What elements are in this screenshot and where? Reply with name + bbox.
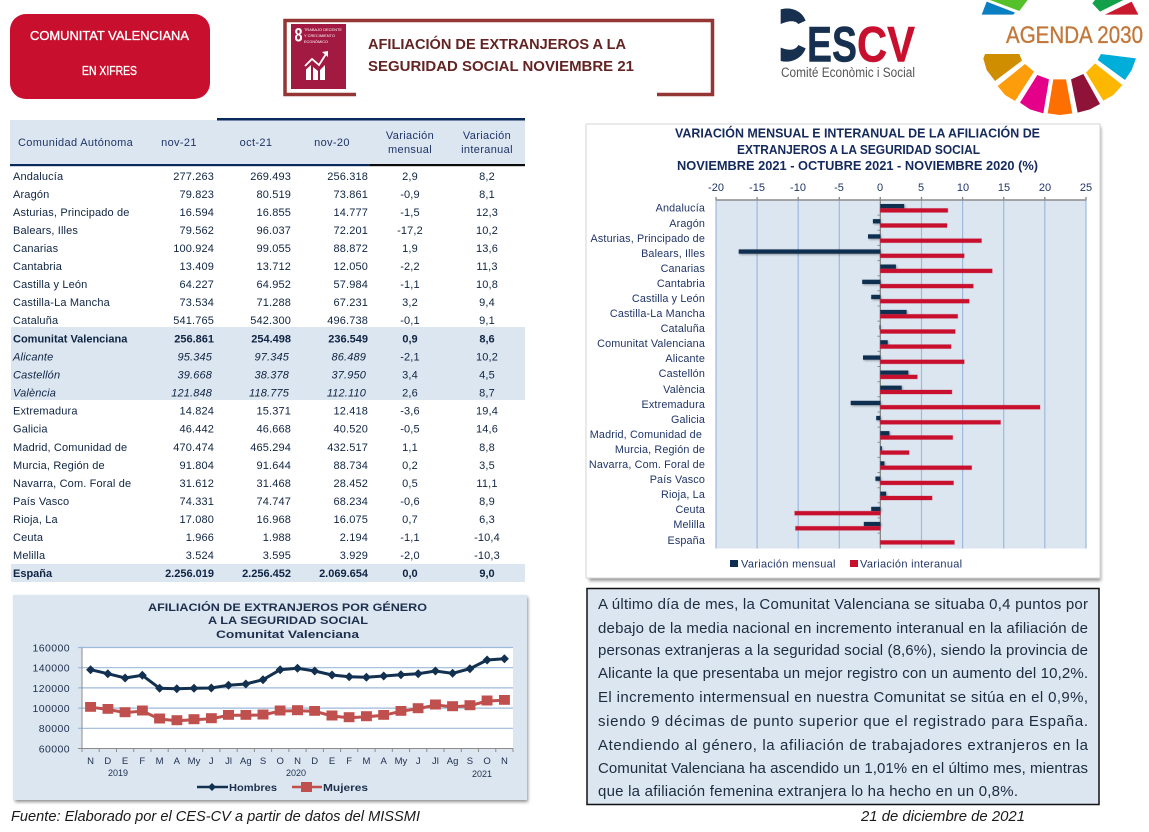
panel: title frame xyxy=(285,20,712,94)
text block: commentary xyxy=(587,588,1099,804)
table row: Balears xyxy=(13,225,498,237)
bar chart top axis: 20 xyxy=(1039,182,1051,194)
table row: Navarra: Navarra, Com. Foral de xyxy=(13,478,131,490)
table row: Galicia: 46.442 xyxy=(179,424,214,436)
table row: Castilla y León xyxy=(13,279,498,291)
line chart legend: Mujeres xyxy=(323,782,368,794)
x axis labels: My xyxy=(395,756,407,767)
table row: País Vasco: 68.234 xyxy=(333,496,368,508)
table row: Cantabria: 11,3 xyxy=(476,261,498,273)
table row: Aragón: -0,9 xyxy=(400,189,420,201)
table row: País Vasco: -0,6 xyxy=(400,496,420,508)
line chart title: A LA SEGURIDAD SOCIAL xyxy=(208,615,368,627)
table row: Balears: 79.562 xyxy=(179,225,214,237)
table row: Galicia: Galicia xyxy=(13,424,48,436)
table row: Madrid: 465.294 xyxy=(250,442,291,454)
bar chart title xyxy=(675,126,1040,173)
table row: Castellón: Castellón xyxy=(13,370,60,382)
category labels: País Vasco xyxy=(650,474,705,486)
icon: SDG 8: ECONÓMICO xyxy=(304,39,328,44)
category labels xyxy=(589,202,705,547)
table row: Rioja: 16.075 xyxy=(333,514,368,526)
table row: Cantabria xyxy=(13,261,498,273)
table row: España: 9,0 xyxy=(479,568,495,580)
bars: variación mensual xyxy=(739,204,908,526)
table row: Cataluña: 9,1 xyxy=(479,315,495,327)
line chart title xyxy=(148,601,427,641)
table row: Castilla y León: 10,8 xyxy=(476,279,498,291)
y axis labels: 120000 xyxy=(33,683,70,695)
table row: Navarra: 31.468 xyxy=(256,478,291,490)
bar chart title: EXTRANJEROS A LA SEGURIDAD SOCIAL xyxy=(737,143,980,157)
table row: València: 118.775 xyxy=(249,388,290,400)
heading: en xifres: EN XIFRES xyxy=(82,63,137,78)
text block: commentary: debajo de la media nacional en incremento interanual en la afiliación de xyxy=(598,620,1088,637)
table row: País Vasco: 8,9 xyxy=(479,496,495,508)
table row: Balears: Balears, Illes xyxy=(13,225,78,237)
y axis labels: 140000 xyxy=(33,662,70,674)
category labels: España xyxy=(667,535,705,547)
table row: València: València xyxy=(13,388,56,400)
table row: Navarra: 11,1 xyxy=(476,478,498,490)
table row: Andalucía: Andalucía xyxy=(13,171,64,183)
x axis labels: N xyxy=(87,756,94,767)
icon: SDG 8: TRABAJO DECENTE xyxy=(304,27,342,32)
table row: Cataluña: 542.300 xyxy=(250,315,291,327)
x axis labels: N xyxy=(294,756,301,767)
table row: Andalucía: 8,2 xyxy=(479,171,495,183)
table row: Galicia xyxy=(13,424,498,436)
table row: Extremadura: Extremadura xyxy=(13,406,78,418)
table row: Cantabria: 12.050 xyxy=(333,261,368,273)
table row: Castilla y León: 64.952 xyxy=(256,279,291,291)
table row: Asturias: -1,5 xyxy=(400,207,420,219)
bar chart top axis: 10 xyxy=(957,182,969,194)
line chart legend xyxy=(197,782,368,794)
title: SEGURIDAD SOCIAL NOVIEMBRE 21 xyxy=(368,59,634,75)
table row: Comunitat Valenciana: 256.861 xyxy=(174,334,214,346)
category labels: Cataluña xyxy=(661,323,705,335)
bar chart top axis: 0 xyxy=(877,182,883,194)
table row: Balears: 96.037 xyxy=(256,225,291,237)
icon: SDG 8 xyxy=(291,24,346,89)
logo: CES CV: ES xyxy=(807,16,857,72)
table row: Cataluña: 496.738 xyxy=(327,315,368,327)
table row: Madrid: 1,1 xyxy=(402,442,418,454)
table row: Rioja: 16.968 xyxy=(256,514,291,526)
bar chart top axis: 15 xyxy=(998,182,1010,194)
text block: commentary: Atendiendo al género, la afiliación de trabajadores extranjeros en la xyxy=(598,737,1089,754)
category labels: Extremadura xyxy=(642,399,705,411)
logo: CES CV: Comité Econòmic i Social xyxy=(781,65,915,80)
category labels: València xyxy=(663,384,705,396)
table header: Variación xyxy=(386,130,434,142)
table row: Madrid xyxy=(13,442,495,454)
x axis labels: Ag xyxy=(240,756,252,767)
heading: Comunitat Valenciana: COMUNITAT VALENCIANA xyxy=(30,28,189,43)
table row: Asturias: 16.855 xyxy=(256,207,291,219)
category labels: Rioja, La xyxy=(661,489,705,501)
table row: Comunitat Valenciana: Comunitat Valenciana xyxy=(13,334,128,346)
text block: commentary: que la afiliación femenina extranjera lo ha hecho en un 0,8%. xyxy=(598,783,1018,800)
table row: Cantabria: 13.712 xyxy=(256,261,291,273)
table row: Melilla: 3.524 xyxy=(186,550,214,562)
table row: Melilla: -2,0 xyxy=(400,550,420,562)
title xyxy=(368,35,634,75)
table row: Comunitat Valenciana xyxy=(13,334,495,346)
table row: Madrid: 432.517 xyxy=(327,442,368,454)
panel: line chart afiliación por género xyxy=(13,595,528,802)
table row: Castilla-La Mancha: 73.534 xyxy=(179,297,214,309)
table row: Alicante xyxy=(12,352,498,364)
bar chart top axis: -10 xyxy=(790,182,806,194)
table row: Asturias: Asturias, Principado de xyxy=(13,207,130,219)
bar chart top axis: -5 xyxy=(834,182,844,194)
table: afiliación por comunidad autónoma xyxy=(10,118,525,582)
table row: Castilla y León: 64.227 xyxy=(179,279,214,291)
category labels: Alicante xyxy=(665,353,705,365)
table row: Navarra: 28.452 xyxy=(333,478,368,490)
table row: Comunitat Valenciana: 8,6 xyxy=(479,334,495,346)
table row: Ceuta: 2.194 xyxy=(340,532,368,544)
table row: València: 2,6 xyxy=(402,388,418,400)
bar chart top axis xyxy=(708,182,1092,194)
table row: Canarias: 100.924 xyxy=(173,243,214,255)
x axis labels: J xyxy=(416,756,421,767)
table row: Melilla: -10,3 xyxy=(474,550,500,562)
table row: España: 2.069.654 xyxy=(319,568,369,580)
table row: València: 8,7 xyxy=(479,388,495,400)
bar chart top axis: 5 xyxy=(918,182,924,194)
line: Mujeres xyxy=(91,700,504,721)
text block: commentary: personas extranjeras a la seguridad social (8,6%), siendo la provincia de xyxy=(598,642,1088,659)
table row: Asturias: 14.777 xyxy=(333,207,368,219)
table row: País Vasco xyxy=(13,496,495,508)
x axis labels: M xyxy=(156,756,164,767)
table row: País Vasco: 74.331 xyxy=(179,496,214,508)
table row: Comunitat Valenciana: 254.498 xyxy=(251,334,291,346)
table header: oct-21 xyxy=(240,137,272,149)
category labels: Comunitat Valenciana xyxy=(597,338,705,350)
table row: Rioja: 0,7 xyxy=(402,514,418,526)
panel: Comunitat Valenciana en xifres xyxy=(10,14,210,99)
y axis labels: 100000 xyxy=(33,703,70,715)
table row: Aragón: 79.823 xyxy=(179,189,214,201)
table row: Canarias: 1,9 xyxy=(402,243,418,255)
line chart legend: Hombres xyxy=(229,782,277,794)
logo: CES CV: CV xyxy=(857,16,916,72)
line: Hombres xyxy=(91,659,504,689)
x axis labels: O xyxy=(483,756,491,767)
bar chart top axis: -20 xyxy=(708,182,724,194)
table row: Rioja: 6,3 xyxy=(479,514,495,526)
x axis labels: O xyxy=(277,756,284,767)
table header: nov-21 xyxy=(161,137,197,149)
x axis labels: Ag xyxy=(447,756,458,767)
category labels: Navarra, Com. Foral de xyxy=(589,459,705,471)
logo: CES CV xyxy=(781,8,916,80)
table row: Cataluña: -0,1 xyxy=(400,315,420,327)
icon: SDG 8: Y CRECIMIENTO xyxy=(304,33,335,38)
table row: Galicia: 40.520 xyxy=(333,424,368,436)
y axis labels: 160000 xyxy=(33,642,70,654)
table row: Rioja: Rioja, La xyxy=(13,514,58,526)
table row: Castellón: 4,5 xyxy=(479,370,495,382)
line chart title: AFILIACIÓN DE EXTRANJEROS POR GÉNERO xyxy=(148,601,427,614)
table row: Balears: -17,2 xyxy=(397,225,423,237)
table row: Comunitat Valenciana: 0,9 xyxy=(402,334,418,346)
x axis labels: D xyxy=(104,756,111,767)
table row: Murcia: 91.804 xyxy=(179,460,214,472)
category labels: Cantabria xyxy=(657,278,705,290)
table row: Castilla-La Mancha: 9,4 xyxy=(479,297,495,309)
table row: Alicante: 86.489 xyxy=(331,352,366,364)
text block: commentary: El incremento intermensual en nuestra Comunitat se sitúa en el 0,9%, xyxy=(598,689,1088,706)
table row: Asturias: 12,3 xyxy=(476,207,498,219)
text block: commentary: Comunitat Valenciana ha ascendido un 1,01% en el último mes, mientras xyxy=(598,760,1088,777)
table row: Castilla-La Mancha xyxy=(13,297,495,309)
x axis labels: 2019 xyxy=(108,768,128,778)
table header xyxy=(18,130,513,156)
line chart title: Comunitat Valenciana xyxy=(216,629,360,641)
x axis labels: 2021 xyxy=(472,769,492,779)
bars: variación interanual xyxy=(795,208,1040,544)
table row: Alicante: -2,1 xyxy=(400,352,420,364)
date: 21 de diciembre de 2021 xyxy=(860,809,1025,825)
table row: Extremadura: 19,4 xyxy=(476,406,498,418)
category labels: Castilla y León xyxy=(632,293,705,305)
category labels: Balears, Illes xyxy=(641,248,705,260)
bar chart title: NOVIEMBRE 2021 - OCTUBRE 2021 - NOVIEMBRE 2020 (%) xyxy=(677,159,1038,173)
table header: interanual xyxy=(461,144,513,156)
table row: Navarra: 31.612 xyxy=(179,478,214,490)
table row: Ceuta: 1.988 xyxy=(263,532,291,544)
text block: commentary: Alicante la que presentaba un mejor registro con un aumento del 10,2%. xyxy=(598,665,1088,682)
table row: Andalucía: 269.493 xyxy=(250,171,291,183)
table row: Cataluña xyxy=(13,315,495,327)
x axis labels: A xyxy=(381,756,388,767)
table row: Castellón: 37.950 xyxy=(331,370,367,382)
table row: España: 2.256.452 xyxy=(242,568,291,580)
table row: Extremadura: -3,6 xyxy=(400,406,420,418)
table row: Andalucía: 2,9 xyxy=(402,171,418,183)
table row: Murcia xyxy=(13,460,495,472)
text block: commentary: siendo 9 décimas de punto superior que el registrado para España. xyxy=(598,713,1088,730)
table row: Murcia: 3,5 xyxy=(479,460,495,472)
table row: Melilla: 3.929 xyxy=(340,550,368,562)
table row: Andalucía: 256.318 xyxy=(327,171,368,183)
table row: Castellón: 38.378 xyxy=(254,370,290,382)
table row: Castilla-La Mancha: 71.288 xyxy=(256,297,291,309)
table row: España: 2.256.019 xyxy=(165,568,214,580)
table row: Cantabria: -2,2 xyxy=(400,261,420,273)
table row: Melilla: 3.595 xyxy=(263,550,291,562)
table row: Aragón: 73.861 xyxy=(333,189,368,201)
y axis labels: 60000 xyxy=(39,744,70,756)
x axis labels: Jl xyxy=(225,756,232,767)
table row: Cataluña: 541.765 xyxy=(173,315,214,327)
table header: Comunidad Autónoma xyxy=(18,137,134,149)
category labels: Castilla-La Mancha xyxy=(610,308,705,320)
table row: Ceuta: -1,1 xyxy=(400,532,420,544)
table row: Madrid: 470.474 xyxy=(173,442,214,454)
table row: València: 121.848 xyxy=(171,388,213,400)
table row: Castilla-La Mancha: Castilla-La Mancha xyxy=(13,297,111,309)
x axis labels: A xyxy=(174,756,181,767)
table row: Comunitat Valenciana: 236.549 xyxy=(328,334,368,346)
table row: Navarra: 0,5 xyxy=(402,478,418,490)
table header: mensual xyxy=(388,144,432,156)
category labels: Ceuta xyxy=(675,504,705,516)
table row: Andalucía: 277.263 xyxy=(173,171,214,183)
logo: Agenda 2030 xyxy=(982,0,1143,115)
table row: Ceuta: 1.966 xyxy=(186,532,214,544)
table row: Alicante: 10,2 xyxy=(476,352,498,364)
table row: Extremadura: 14.824 xyxy=(179,406,214,418)
table row: Andalucía xyxy=(13,171,495,183)
table row: Castilla y León: -1,1 xyxy=(400,279,420,291)
table row: Melilla xyxy=(13,550,500,562)
table row: Rioja: 17.080 xyxy=(179,514,214,526)
source note: Fuente: Elaborado por el CES-CV a partir de datos del MISSMI xyxy=(11,809,420,825)
table row: Cataluña: Cataluña xyxy=(13,315,59,327)
table row: España: España xyxy=(13,568,53,580)
x axis labels: F xyxy=(346,756,352,767)
category labels: Murcia, Región de xyxy=(615,444,705,456)
table row: Extremadura: 15.371 xyxy=(256,406,291,418)
table row: Castellón: 3,4 xyxy=(402,370,418,382)
x axis labels: D xyxy=(311,756,318,767)
table row: Balears: 10,2 xyxy=(476,225,498,237)
bar chart top axis: 25 xyxy=(1080,182,1092,194)
category labels: Galicia xyxy=(671,414,705,426)
x axis labels: M xyxy=(362,756,370,767)
table row: Cantabria: 13.409 xyxy=(179,261,214,273)
title: AFILIACIÓN DE EXTRANJEROS A LA xyxy=(368,35,627,53)
x axis labels: 2020 xyxy=(286,768,306,778)
category labels: Asturias, Principado de xyxy=(591,233,705,245)
table row: Canarias: Canarias xyxy=(13,243,59,255)
table row: Alicante: Alicante xyxy=(12,352,53,364)
table row: Aragón xyxy=(13,189,495,201)
table row: Murcia: 88.734 xyxy=(333,460,368,472)
table row: Extremadura xyxy=(13,406,498,418)
table row: Castellón xyxy=(13,370,495,382)
y axis labels xyxy=(33,642,70,756)
table row: Asturias: 16.594 xyxy=(179,207,214,219)
x axis labels: S xyxy=(260,756,266,767)
table row: València: 112.110 xyxy=(327,388,367,400)
table row: Aragón: Aragón xyxy=(13,189,49,201)
bar chart legend: Variación mensual xyxy=(741,558,836,570)
category labels: Canarias xyxy=(661,263,705,275)
table row: Canarias: 88.872 xyxy=(333,243,368,255)
table row: Cantabria: Cantabria xyxy=(13,261,63,273)
category labels: Melilla xyxy=(673,519,705,531)
x axis labels: My xyxy=(188,756,201,767)
table row: Melilla: Melilla xyxy=(13,550,46,562)
table row: Alicante: 95.345 xyxy=(177,352,213,364)
table row: Galicia: -0,5 xyxy=(400,424,420,436)
category labels: Aragón xyxy=(669,218,705,230)
table row: País Vasco: 74.747 xyxy=(256,496,291,508)
x axis labels: Jl xyxy=(432,756,439,767)
table row: Murcia: 91.644 xyxy=(256,460,291,472)
table row: España: 0,0 xyxy=(402,568,418,580)
table row: Castilla y León: 57.984 xyxy=(333,279,368,291)
table row: Canarias xyxy=(13,243,498,255)
x axis labels: F xyxy=(139,756,145,767)
table row: Aragón: 80.519 xyxy=(256,189,291,201)
table row: Castilla-La Mancha: 3,2 xyxy=(402,297,418,309)
table header: nov-20 xyxy=(314,137,350,149)
bar chart top axis: -15 xyxy=(749,182,765,194)
table row: Balears: 72.201 xyxy=(333,225,368,237)
table row: Murcia: Murcia, Región de xyxy=(13,460,105,472)
table row: Castilla-La Mancha: 67.231 xyxy=(333,297,368,309)
x axis labels: E xyxy=(329,756,335,767)
x axis labels xyxy=(87,756,508,779)
table row: Castellón: 39.668 xyxy=(177,370,213,382)
table row: España xyxy=(13,568,495,580)
table row: Rioja xyxy=(13,514,495,526)
table header: Variación xyxy=(463,130,511,142)
category labels: Castellón xyxy=(659,368,705,380)
x axis labels: E xyxy=(122,756,128,767)
table row: Madrid: 8,8 xyxy=(479,442,495,454)
table row: València xyxy=(13,388,495,400)
table row: País Vasco: País Vasco xyxy=(13,496,69,508)
table row: Galicia: 46.668 xyxy=(256,424,291,436)
panel: bar chart variación mensual e interanual xyxy=(586,124,1101,581)
table row: Aragón: 8,1 xyxy=(479,189,495,201)
category labels: Madrid, Comunidad de xyxy=(590,429,702,441)
table row: Extremadura: 12.418 xyxy=(333,406,368,418)
y axis labels: 80000 xyxy=(39,723,70,735)
table row: Ceuta xyxy=(13,532,500,544)
table row: Canarias: 99.055 xyxy=(256,243,291,255)
x axis labels: N xyxy=(501,756,508,767)
table row: Asturias xyxy=(13,207,498,219)
table row: Navarra xyxy=(13,478,498,490)
bar chart title: VARIACIÓN MENSUAL E INTERANUAL DE LA AFILIACIÓN DE xyxy=(675,126,1040,140)
table row: Galicia: 14,6 xyxy=(476,424,498,436)
x axis labels: J xyxy=(209,756,214,767)
table row: Ceuta: -10,4 xyxy=(474,532,500,544)
bar chart legend: Variación interanual xyxy=(860,558,962,570)
category labels: Andalucía xyxy=(656,202,705,214)
x axis labels: S xyxy=(467,756,473,767)
table row: Castilla y León: Castilla y León xyxy=(13,279,87,291)
bar chart legend xyxy=(730,558,962,570)
text block: commentary: A último día de mes, la Comunitat Valenciana se situaba 0,4 puntos por xyxy=(598,596,1088,613)
table row: Canarias: 13,6 xyxy=(476,243,498,255)
icon: SDG 8: 8 xyxy=(294,26,302,46)
table row: Madrid: Madrid, Comunidad de xyxy=(13,442,127,454)
table row: Ceuta: Ceuta xyxy=(13,532,44,544)
table row: Murcia: 0,2 xyxy=(402,460,418,472)
table row: Alicante: 97.345 xyxy=(254,352,290,364)
